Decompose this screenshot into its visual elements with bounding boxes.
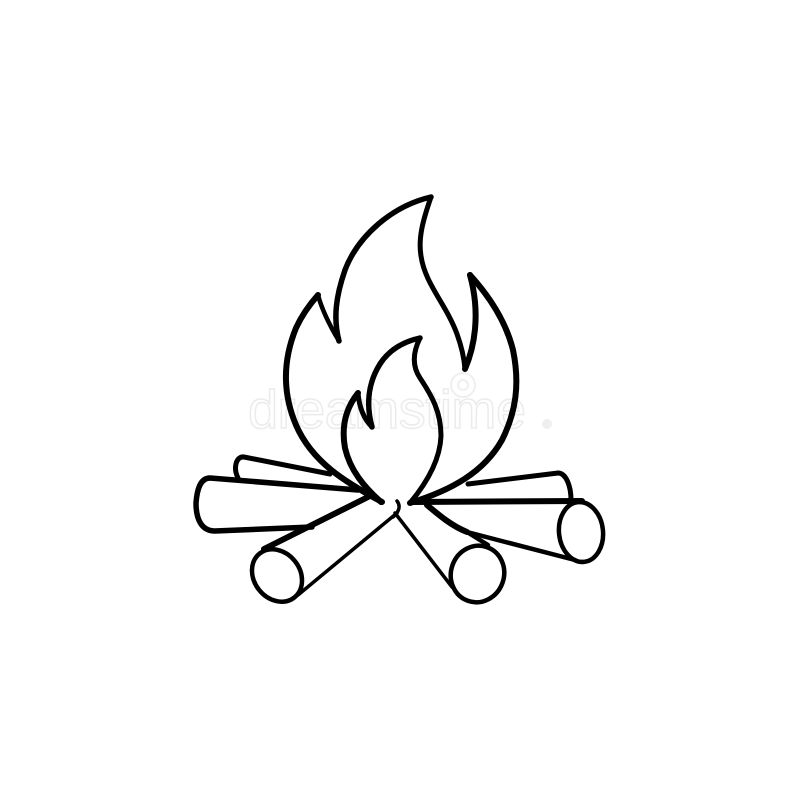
front left log: [242, 497, 397, 612]
right logs: [393, 473, 606, 610]
back left log: [236, 457, 330, 478]
left logs: [196, 457, 397, 612]
middle left log: [196, 478, 358, 531]
middle right log: [412, 500, 606, 564]
watermark: dreamstime: [248, 380, 526, 440]
log joint notch: [393, 501, 399, 517]
outer flame: [286, 197, 516, 503]
front right log: [395, 513, 512, 610]
inner flame: [344, 338, 441, 503]
back right log: [468, 473, 571, 500]
